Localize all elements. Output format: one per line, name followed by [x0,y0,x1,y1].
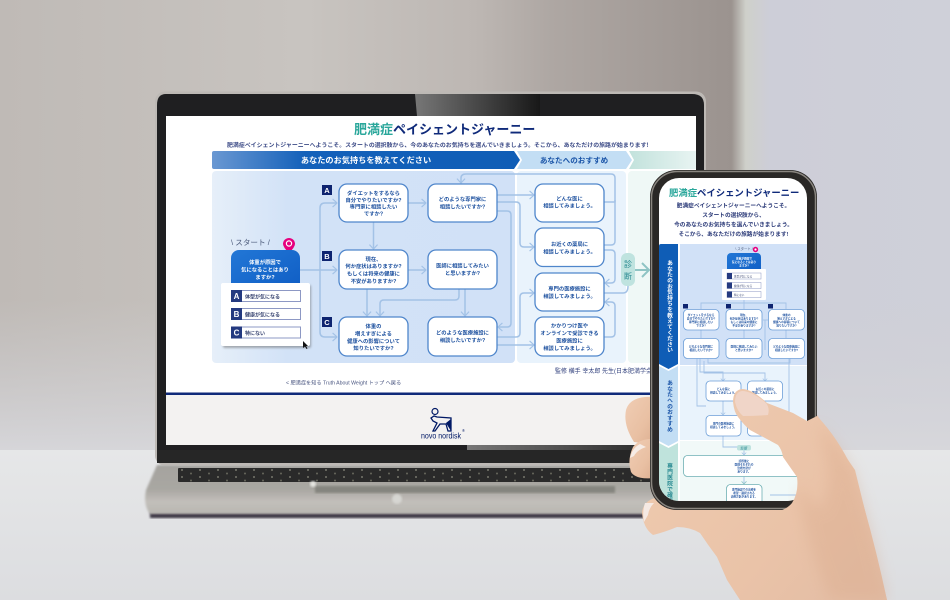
diagnosis pill [621,253,635,286]
label B: B [324,252,330,261]
question: consult doctor: と思いますか? [445,270,480,277]
option B: 健康が気になる [245,312,280,318]
phone treatment box: 治療方針があります。 [731,494,757,498]
icon: phone start pin [753,247,758,252]
phone panel: feelings [680,244,808,365]
step header: hospital [629,151,696,169]
phone step: recommendations [659,366,678,446]
question: diet [339,184,408,222]
question: facility [428,317,497,356]
question: consult doctor [428,250,497,289]
hand back: palm and fingers behind phone [625,397,887,600]
diagnosis pill: 診 [624,259,632,269]
laptop base [145,465,690,518]
page title: 肥満症ペイシェントジャーニー [354,122,535,137]
supervisor credit: 監修 横手 幸太郎 先生(日本肥満学会理事長) [555,367,672,375]
question: diet: ダイエットをするなら [347,189,400,197]
icon: cursor [303,341,308,349]
page intro text: 肥満症ペイシェントジャーニーへようこそ。スタートの選択肢から、今のあなたのお気持ちを選んでいきましょう。そこから、あなただけの旅路が始まります! [227,141,649,149]
label A: A [324,186,330,195]
phone start label: \ スタート / [735,246,753,251]
phone intro text [674,202,793,238]
recommendation: specialist facility: 専門の医療施設に [548,284,591,292]
phone [650,170,817,510]
phone recommendation: pharmacy: 相談してみましょう。 [752,390,778,394]
option A [231,290,300,302]
phone question: doctor [726,338,762,358]
phone start box: 体重が原因で [736,256,752,260]
question: symptoms: 不安がありますか? [351,277,396,285]
footer [166,392,696,445]
recommendation: doctor: 相談してみましょう。 [543,202,596,210]
phone intro text: そこから、あなただけの旅路が始まります! [679,230,789,238]
option A: A [234,292,240,301]
phone question: diet [684,310,719,330]
phone question: facility: どのような医療施設に [773,344,800,348]
start question box: 体重が原因で [249,258,281,266]
phone question: facility [768,338,804,358]
start question box [231,250,300,283]
question: weight impact [339,317,408,356]
phone intro text: スタートの選択肢から、 [702,211,765,219]
question: symptoms: 現在、 [366,255,381,263]
recommendation: online: 医療施設に [556,336,583,344]
phone step: hospital: 専門医院で確定 [666,462,672,505]
phone diagnosis box: 医師それぞれの [735,462,754,466]
phone title: 肥満症ペイシェントジャーニー [669,187,799,198]
question: weight impact: 知りたいですか? [353,344,394,352]
icon: start pin [283,238,295,250]
recommendation: online [535,317,604,356]
phone question: facility: 相談したいですか? [775,348,798,352]
phone step: hospital [659,443,678,505]
phone question: symptoms: もしくは将来の健康に [731,320,758,324]
recommendation: online: かかりつけ医や [551,322,588,330]
recommendation: pharmacy [535,228,604,266]
phone label B [726,304,731,308]
panel: recommendations [517,171,626,363]
phone question: diet: ですか? [696,324,706,328]
phone recommendation: specialist [706,416,741,436]
phone panel: recommendations [680,366,808,440]
phone treatment box [726,484,762,508]
phone options card [722,269,766,300]
step header: recommendations: あなたへのおすすめ [540,155,609,165]
label A [322,185,332,195]
start question box: ますか? [255,274,275,281]
phone step: feelings: あなたのお気持ちを教えてください [666,260,672,353]
novo nordisk logo: novo nordisk [421,432,462,440]
phone start box: 気になることはあり [732,260,756,264]
hand shading [797,424,887,600]
phone recommendation: doctor: どんな医に [717,387,731,391]
phone recommendation: doctor [706,381,741,401]
start question box: 気になることはあり [241,266,289,274]
option A: 体型が気になる [245,294,280,300]
phone label C [768,304,773,308]
hand front: thumb and palm over phone [733,389,887,600]
phone step: recommendations: あなたへのおすすめ [666,380,672,434]
recommendation: pharmacy: お近くの薬局に [551,240,588,248]
phone recommendation: specialist: 専門の医療施設に [713,422,735,426]
option C: C [234,328,240,338]
diagnosis pill: 断 [624,271,632,281]
question: specialist: どのような専門家に [439,195,486,203]
phone diagnosis box: 治療方針が [737,466,751,470]
recommendation: doctor [535,184,604,222]
label C [322,317,332,327]
question: facility: 相談したいですか? [440,336,485,344]
phone diagnosis pill: 診断 [740,445,748,450]
start options card [221,283,311,349]
laptop lid [155,92,706,466]
question: diet: 専門家に相談したい [350,202,397,210]
phone recommendation: online [748,416,782,436]
laptop screen: web page [166,116,698,445]
laptop [145,92,706,518]
question: weight impact: 増えすぎによる [355,330,392,338]
question: symptoms: 何か症状はありますか? [345,262,402,270]
question: weight impact: 体重の [366,322,381,330]
step header: feelings: あなたのお気持ちを教えてください [301,155,431,165]
panel: hospital [628,171,668,363]
step header: feelings [212,151,520,169]
phone recommendation: pharmacy: お近くの薬局に [756,387,775,391]
phone panel: hospital [680,441,808,503]
phone question: specialist [684,338,719,358]
phone question: diet: 専門家に相談したい [689,320,713,324]
phone step: feelings [659,244,678,369]
phone question: weight: 知りたいですか? [776,324,797,328]
phone options card: 健康が気になる [734,284,753,288]
phone question: diet: ダイエットをするなら [688,313,715,317]
step header: recommendations [517,151,632,169]
question: diet: ですか? [364,210,383,218]
phone question: symptoms: 現在、 [740,313,748,317]
question: symptoms [339,250,408,289]
phone intro text: 今のあなたのお気持ちを選んでいきましょう。 [674,220,793,228]
phone diagnosis box: あります。 [737,470,751,474]
option C [231,326,300,338]
phone options card: 特にない [734,293,745,297]
phone intro text: 肥満症ペイシェントジャーニーへようこそ。 [677,202,790,210]
question: specialist: 相談したいですか? [440,202,485,210]
phone question: doctor: 医師に相談してみたい [731,344,758,348]
phone question: symptoms: 不安がありますか? [732,324,756,328]
phone question: doctor: と思いますか? [735,348,753,352]
phone question: weight: 体重の [782,313,791,317]
phone options card: 体型が気になる [734,274,753,278]
recommendation: specialist facility: 相談してみましょう。 [543,292,596,300]
question: diet: 自分でやりたいですか? [345,196,402,204]
novo nordisk logo [421,408,465,440]
question: facility: どのような医療施設に [436,328,489,336]
phone question: diet: 自分でやりたいですか? [687,316,716,320]
recommendation: online: 相談してみましょう。 [543,344,596,352]
flow arrows [300,174,628,345]
phone question: specialist: 相談したいですか? [689,348,713,352]
phone start box [727,253,761,275]
phone treatment box: 専門施設での治療を [732,488,756,492]
phone question: weight: 増えすぎによる [777,316,796,320]
phone flow arrows [697,300,800,495]
novo nordisk logo: ® [462,428,465,433]
phone question: symptoms: 何か症状はありますか? [730,316,759,320]
start label: \ スタート / [231,238,271,247]
phone treatment box: 希望・選択される [733,491,755,495]
arrow: to hospital [635,263,649,277]
phone question: weight [768,310,804,330]
question: specialist [428,184,497,222]
label C: C [324,318,330,327]
phone recommendation: doctor: 相談してみましょう。 [710,390,737,394]
option C: 特にない [245,330,265,337]
question: symptoms: もしくは将来の健康に [347,270,400,278]
back link: < 肥満症を知る Truth About Weight トップ へ戻る [286,378,401,386]
phone recommendation: pharmacy [748,381,782,401]
recommendation: online: オンラインで受診できる [540,329,599,337]
phone question: specialist: どのような専門家に [689,344,713,348]
option B [231,308,300,320]
phone question: symptoms [726,310,762,330]
phone label A [683,304,688,308]
phone recommendation: specialist: 相談してみましょう。 [710,425,737,429]
phone diagnosis box: 診察後に [739,459,750,463]
recommendation: pharmacy: 相談してみましょう。 [543,248,596,256]
panel: feelings [212,171,515,363]
phone screen [659,187,808,508]
recommendation: specialist facility [535,273,604,311]
thumb nail [735,391,769,416]
phone diagnosis box [684,456,802,476]
phone diagnosis pill [737,445,751,450]
phone question: weight: 健康への影響について [773,320,800,324]
label B [322,251,332,261]
recommendation: doctor: どんな医に [556,194,583,202]
question: weight impact: 健康への影響について [347,337,400,345]
question: consult doctor: 医師に相談してみたい [436,262,489,270]
phone start box: ますか? [739,264,749,268]
option B: B [234,310,240,319]
